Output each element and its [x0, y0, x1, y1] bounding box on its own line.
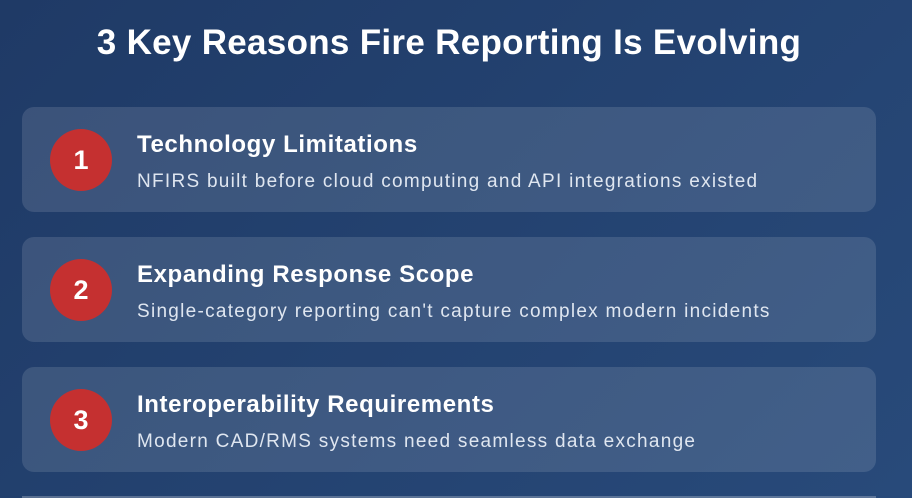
badge 2: 2	[73, 275, 89, 305]
card 2	[22, 237, 876, 342]
heading 1: Technology Limitations	[137, 131, 418, 158]
desc 3: Modern CAD/RMS systems need seamless data exchange	[137, 431, 696, 452]
card 1	[22, 107, 876, 212]
card 3	[22, 367, 876, 472]
badge 1	[50, 129, 112, 191]
badge 2	[50, 259, 112, 321]
badge 3	[50, 389, 112, 451]
badge 3: 3	[73, 405, 89, 435]
badge 1: 1	[73, 145, 89, 175]
title: 3 Key Reasons Fire Reporting Is Evolving	[97, 23, 801, 62]
heading 2: Expanding Response Scope	[137, 261, 474, 288]
desc 2: Single-category reporting can't capture complex modern incidents	[137, 301, 771, 322]
heading 3: Interoperability Requirements	[137, 391, 494, 418]
desc 1: NFIRS built before cloud computing and API integrations existed	[137, 171, 758, 192]
